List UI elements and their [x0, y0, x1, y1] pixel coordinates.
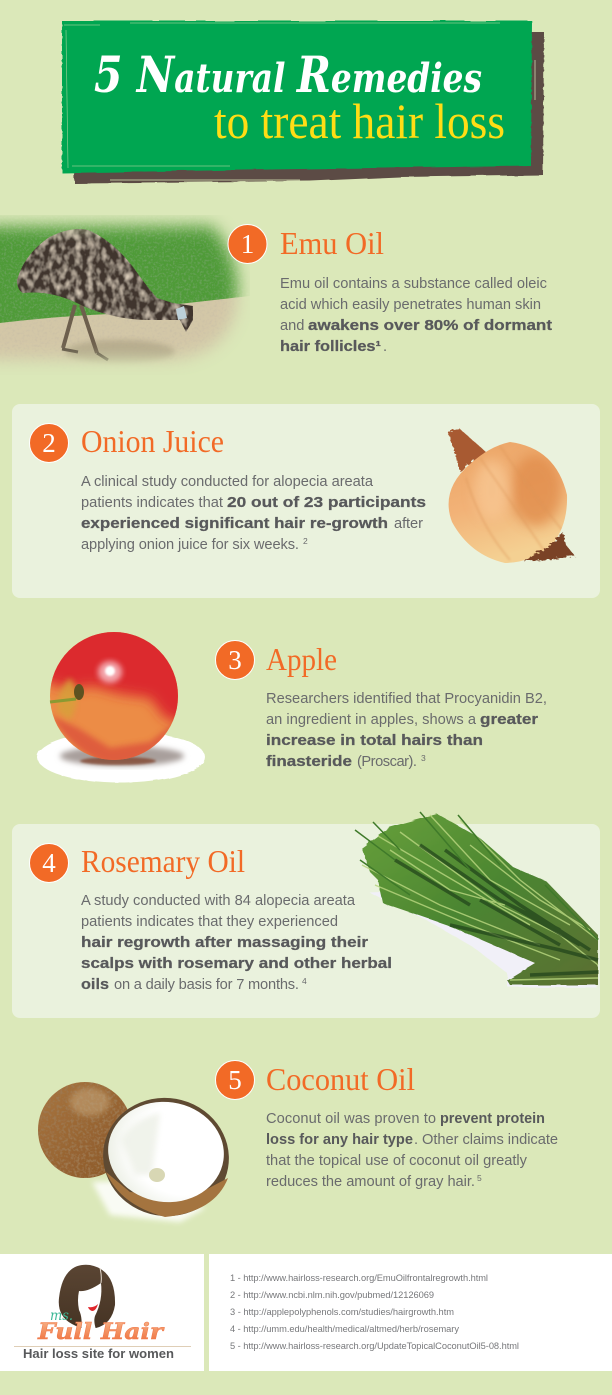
panel: emu oil	[0, 215, 552, 375]
reference list: 3 - http://applepolyphenols.com/studies/hairgrowth.htm	[230, 1307, 454, 1317]
panel background	[12, 404, 600, 598]
image: emu	[0, 215, 250, 375]
reference list: 4 - http://umm.edu/health/medical/altmed/herb/rosemary	[230, 1324, 459, 1334]
text: coconut oil: Other claims indicate	[422, 1132, 558, 1148]
logo: tagline: Hair loss site for women	[23, 1347, 174, 1361]
image: rosemary	[355, 812, 598, 988]
title banner	[62, 21, 544, 183]
banner green panel	[62, 21, 532, 173]
text: apple	[266, 691, 547, 770]
reference list: 5 - http://www.hairloss-research.org/UpdateTopicalCoconutOil5-08.html	[230, 1341, 519, 1351]
number badge 3: 3	[228, 645, 242, 675]
text: coconut oil: reduces the amount of gray hair.	[266, 1174, 475, 1190]
number badge 4	[30, 844, 68, 882]
reference list: 2 - http://www.ncbi.nlm.nih.gov/pubmed/12126069	[230, 1290, 434, 1300]
text: emu oil: awakens over 80% of dormant	[308, 318, 552, 334]
logo: ms: ms.	[50, 1308, 73, 1324]
panel: apple	[37, 620, 547, 783]
panel background	[12, 824, 600, 1018]
text: emu oil: acid which easily penetrates human skin	[280, 297, 541, 313]
text: onion juice: experienced significant hair re-growth	[81, 516, 388, 532]
panel: coconut oil	[38, 1060, 558, 1226]
title line 1: 5 Natural Remedies	[94, 45, 482, 104]
image: coconut	[38, 1082, 238, 1226]
text: coconut oil	[266, 1111, 558, 1190]
number badge 2: 2	[42, 428, 56, 458]
text: apple: an ingredient in apples, shows a	[266, 712, 477, 728]
number badge 3	[216, 640, 254, 680]
heading: rosemary oil: Rosemary Oil	[81, 843, 245, 879]
text: coconut oil: 5	[477, 1173, 482, 1183]
text: rosemary oil	[81, 893, 392, 993]
text: rosemary oil: scalps with rosemary and other herbal	[81, 956, 392, 972]
text: rosemary oil: oils	[81, 977, 109, 993]
text: emu oil: hair follicles¹	[280, 339, 381, 355]
text: onion juice: applying onion juice for six weeks.	[81, 537, 299, 553]
text: onion juice: after	[394, 516, 423, 532]
heading: emu oil: Emu Oil	[280, 225, 384, 261]
text: coconut oil: that the topical use of coconut oil greatly	[266, 1153, 528, 1169]
reference list	[230, 1273, 519, 1351]
text: rosemary oil: patients indicates that they experienced	[81, 914, 338, 930]
panel: rosemary oil	[12, 812, 600, 1018]
text: coconut oil: .	[414, 1132, 418, 1148]
logo: hair icon	[59, 1265, 115, 1332]
coconut front shell	[94, 1088, 238, 1226]
text: onion juice: A clinical study conducted for alopecia areata	[81, 474, 374, 490]
text: apple: Researchers identified that Procyanidin B2,	[266, 691, 547, 707]
panel: onion juice	[12, 404, 600, 598]
text: onion juice	[81, 474, 426, 553]
text: emu oil	[280, 276, 552, 355]
text: onion juice: patients indicates that	[81, 495, 223, 511]
number badge 1	[228, 224, 267, 264]
footer: references panel	[209, 1254, 612, 1371]
plate	[37, 731, 205, 783]
number badge 4: 4	[42, 848, 56, 878]
text: apple: increase in total hairs than	[266, 733, 483, 749]
text: apple: greater	[480, 712, 538, 728]
text: rosemary oil: 4	[302, 976, 307, 986]
reference list: 1 - http://www.hairloss-research.org/EmuOilfrontalregrowth.html	[230, 1273, 488, 1283]
logo: full hair: Full Hair	[37, 1319, 165, 1345]
heading: onion juice: Onion Juice	[81, 423, 224, 459]
heading: coconut oil: Coconut Oil	[266, 1061, 415, 1097]
image: onion	[448, 429, 575, 563]
text: rosemary oil: hair regrowth after massaging their	[81, 935, 368, 951]
text: emu oil: .	[383, 339, 387, 355]
number badge 5: 5	[228, 1065, 242, 1095]
text: apple: (Proscar).	[357, 754, 417, 770]
text: emu oil: Emu oil contains a substance called oleic	[280, 276, 547, 292]
text: apple: finasteride	[266, 754, 352, 770]
coconut shadow	[92, 1180, 205, 1222]
banner shadow	[73, 32, 544, 183]
text: coconut oil: Coconut oil was proven to	[266, 1111, 436, 1127]
text: emu oil: and	[280, 318, 304, 334]
heading: apple: Apple	[266, 641, 337, 677]
number badge 5	[216, 1060, 254, 1100]
title line 2: to treat hair loss	[214, 93, 505, 149]
coconut flesh	[102, 1094, 230, 1210]
image: apple	[37, 620, 205, 783]
number badge 1: 1	[241, 229, 254, 259]
text: apple: 3	[421, 753, 426, 763]
number badge 2	[30, 424, 68, 462]
text: rosemary oil: A study conducted with 84 alopecia areata	[81, 893, 356, 909]
coconut back shell	[38, 1082, 132, 1178]
text: onion juice: 2	[303, 536, 308, 546]
footer: logo panel	[0, 1254, 204, 1371]
text: coconut oil: loss for any hair type	[266, 1132, 413, 1148]
text: coconut oil: prevent protein	[440, 1111, 545, 1127]
text: onion juice: 20 out of 23 participants	[227, 495, 426, 511]
text: rosemary oil: on a daily basis for 7 months.	[114, 977, 299, 993]
